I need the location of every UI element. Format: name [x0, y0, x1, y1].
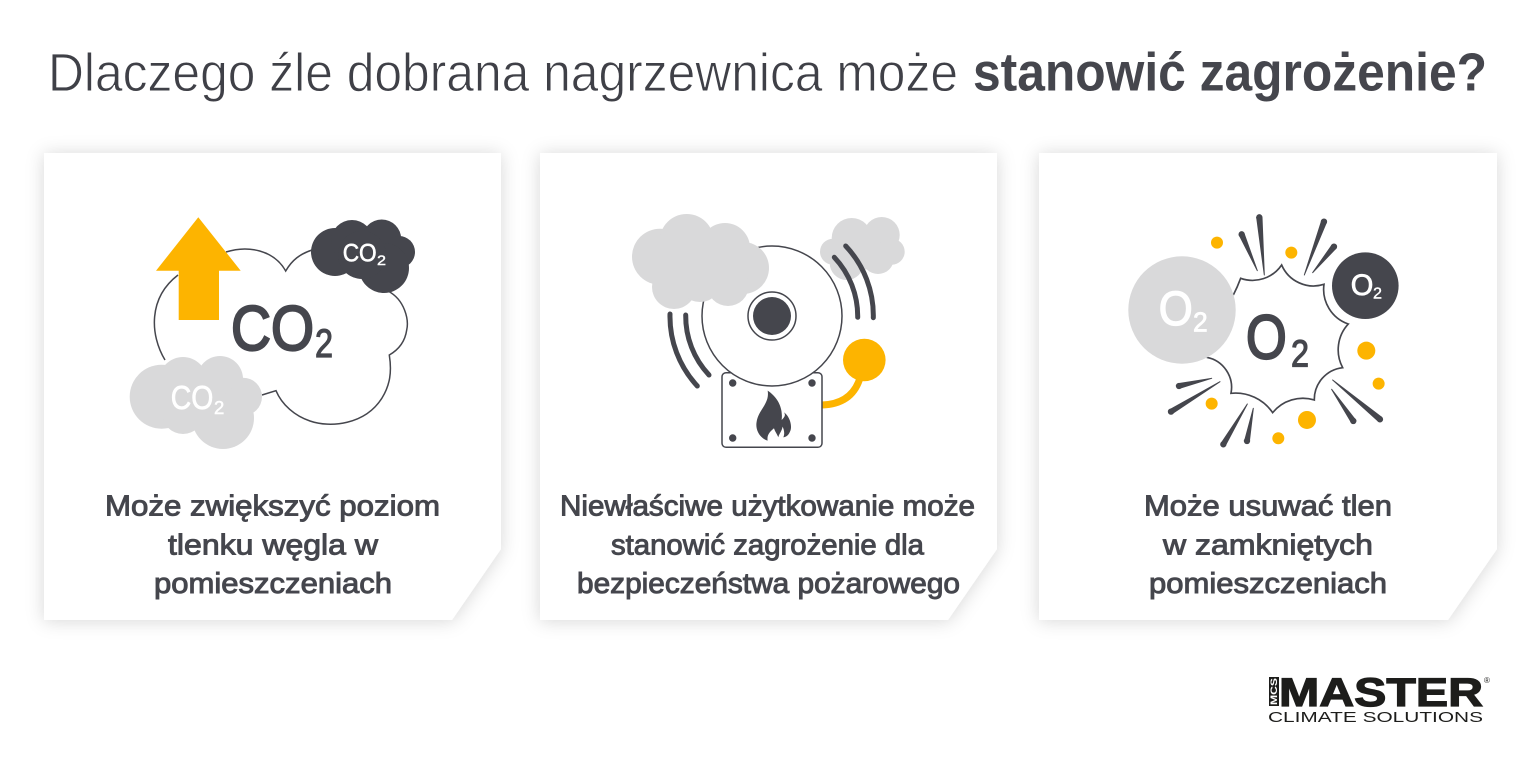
burst outline [1207, 265, 1348, 413]
logo: Master Climate Solutions: ® [1484, 676, 1490, 685]
yellow dots [1206, 237, 1385, 444]
grey cloud [130, 356, 262, 449]
panel: fire safety [540, 153, 997, 620]
text: panel 2 caption: stanowić zagrożenie dla [611, 530, 924, 562]
title: Dlaczego źle dobrana nagrzewnica może [48, 43, 958, 103]
left smoke cloud [632, 214, 769, 309]
label: O2: O [1246, 303, 1287, 372]
text: panel 1 caption [105, 490, 440, 600]
text: panel 3 caption: Może usuwać tlen [1144, 490, 1392, 522]
dark O2 bubble [1332, 252, 1399, 319]
mounting plate [722, 373, 822, 447]
yellow striker [822, 339, 886, 405]
text: panel 1 caption: Może zwiększyć poziom [105, 490, 440, 522]
title [48, 42, 1487, 103]
logo: Master Climate Solutions: MCS [1269, 678, 1279, 705]
grey O2 bubble: O [1159, 283, 1193, 336]
label: O2: 2 [1291, 334, 1309, 376]
vibration lines [670, 246, 873, 386]
label: CO2: 2 [315, 322, 333, 366]
icon: flame [756, 391, 791, 441]
dark O2 bubble: 2 [1373, 286, 1382, 303]
text: panel 3 caption [1144, 490, 1392, 600]
icon: fire alarm bell [632, 214, 905, 447]
dark cloud: 2 [377, 252, 386, 268]
panel: carbon monoxide [44, 153, 501, 620]
label: CO2: CO [231, 294, 314, 364]
bell centre [748, 292, 796, 340]
dark cloud: CO [343, 240, 377, 268]
title: stanowić zagrożenie? [973, 42, 1487, 102]
text: panel 2 caption: bezpieczeństwa pożarowego [577, 568, 960, 600]
logo: Master Climate Solutions: MASTER [1279, 671, 1483, 715]
logo: Master Climate Solutions: CLIMATE SOLUTIONS [1268, 709, 1483, 726]
text: panel 3 caption: w zamkniętych [1162, 530, 1373, 562]
grey O2 bubble: 2 [1193, 307, 1208, 338]
right smoke cloud [820, 217, 905, 280]
text: panel 1 caption: pomieszczeniach [154, 568, 392, 600]
grey cloud: CO [171, 379, 213, 416]
text: panel 2 caption: Niewłaściwe użytkowanie może [560, 490, 975, 522]
icon: oxygen burst [1128, 215, 1399, 447]
text: panel 3 caption: pomieszczeniach [1149, 568, 1387, 600]
grey cloud: 2 [214, 398, 224, 418]
grey O2 bubble [1128, 256, 1236, 364]
bell [702, 246, 842, 386]
panel: oxygen [1039, 153, 1497, 620]
icon: CO2 clouds [130, 217, 415, 449]
text: panel 2 caption [560, 490, 975, 600]
text: panel 1 caption: tlenku węgla w [168, 530, 378, 562]
dark O2 bubble: O [1351, 269, 1373, 302]
logo: Master Climate Solutions [1268, 671, 1490, 726]
dark cloud [311, 220, 415, 293]
icon: up arrow [156, 217, 241, 320]
spikes [1168, 215, 1383, 447]
